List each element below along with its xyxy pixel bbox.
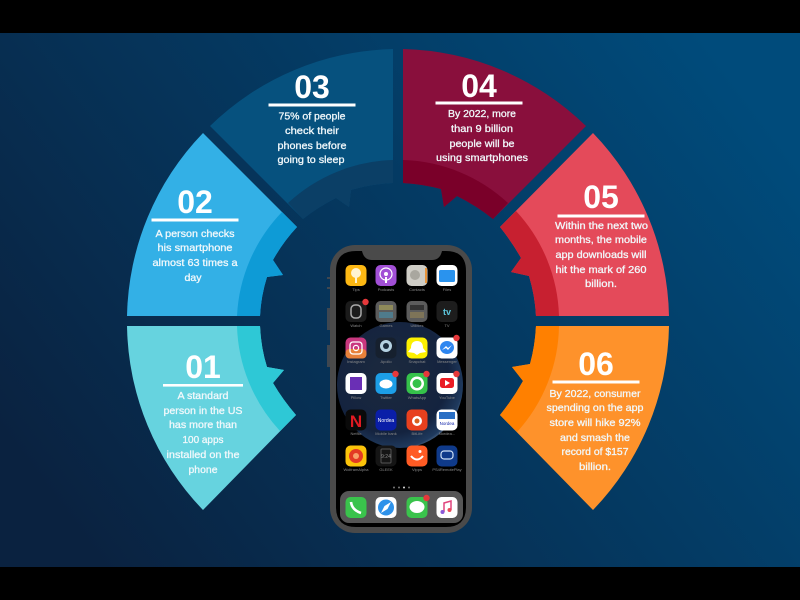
icon: Watch (346, 299, 369, 328)
icon: Instagram: Instagram (347, 359, 366, 364)
icon: YouTube: YouTube (439, 395, 456, 400)
icon: Pillow (346, 373, 366, 400)
icon: GLEEK: 9:24 (381, 454, 391, 460)
icon: TV (436, 301, 458, 328)
text 05 (555, 221, 648, 290)
text 06: record of $157 (562, 447, 629, 458)
text 04: using smartphones (436, 153, 528, 164)
text 03 (278, 112, 347, 166)
segment 06 main shape (500, 326, 669, 510)
icon: Files: Files (443, 287, 451, 292)
number 05: 05 (583, 179, 619, 215)
icon: Netflix: Netflix (350, 431, 362, 436)
segment 06 inner band (500, 326, 559, 432)
text 04: By 2022, more (448, 109, 516, 120)
icon: WolframAlpha: WolframAlpha (343, 467, 369, 472)
icon: Twitter (376, 371, 399, 400)
text 02: A person checks (156, 229, 234, 240)
icon: YouTube (436, 371, 460, 400)
icon: Snapchat (406, 338, 428, 364)
icon: Files (436, 265, 458, 292)
number 04: 04 (461, 68, 497, 104)
icon: Nordea: Nordea (440, 421, 455, 426)
icon: WhatsApp (406, 371, 430, 400)
panel: 02 checks per day (127, 133, 297, 316)
segment 02 main shape (127, 133, 297, 316)
text 05: Within the next two (555, 221, 648, 232)
icon: Utilities: Utilities (411, 323, 423, 328)
text 01: has more than (169, 420, 237, 431)
phone (327, 245, 472, 533)
icon: Vipps: Vipps (412, 467, 422, 472)
icon: BitLife: BitLife (411, 431, 423, 436)
icon: Contacts (406, 265, 428, 292)
icon: Messenger: Messenger (437, 359, 458, 364)
panel: 05 app downloads (500, 133, 669, 316)
text 05: months, the mobile (555, 235, 647, 246)
icon: Games: Games (380, 323, 392, 328)
wallpaper earth (337, 322, 463, 448)
text 03: phones before (278, 141, 347, 152)
icon: Games (376, 301, 396, 328)
side buttons (327, 277, 330, 367)
text 02 (152, 229, 238, 284)
panel: 01 apps installed (127, 326, 296, 510)
icon: Watch: Watch (350, 323, 362, 328)
segment 04 inner band (403, 160, 508, 219)
text 05: hit the mark of 260 (556, 265, 647, 276)
icon: Safari (376, 497, 396, 518)
text 04: than 9 billion (451, 124, 513, 135)
phone screen (336, 251, 466, 527)
text 05: billion. (585, 279, 617, 290)
icon: Contacts: Contacts (409, 287, 425, 292)
icon: Podcasts: Podcasts (378, 287, 394, 292)
text 03: 75% of people (278, 112, 346, 122)
icon: Netflix (346, 410, 366, 436)
icon: BitLife (406, 410, 428, 436)
text 01: 100 apps (182, 435, 224, 446)
panel: 04 billion users (403, 49, 586, 219)
icon: Music (436, 497, 458, 518)
icon: Apollo (376, 338, 396, 364)
icon: Snapchat: Snapchat (409, 359, 426, 364)
icon: PS4RemotePlay (432, 446, 462, 472)
text 06: spending on the app (546, 403, 644, 414)
text 02: day (184, 273, 202, 284)
text 06: store will hike 92% (550, 418, 640, 429)
text 05: app downloads will (556, 250, 646, 261)
icon: Pillow: Pillow (351, 395, 361, 400)
page dots (393, 486, 410, 488)
underline 02 (152, 218, 238, 222)
icon: PS4RemotePlay: PS4RemotePlay (432, 467, 462, 472)
text 06: and smash the (560, 433, 630, 444)
text 04 (436, 109, 528, 164)
underline 01 (163, 384, 243, 387)
icon: Vipps (406, 446, 428, 472)
icon: Mobile bank (375, 410, 397, 436)
text 01: A standard (178, 391, 229, 402)
icon: TV: TV (444, 323, 450, 328)
segment 03 inner band (288, 160, 393, 219)
segment 03 main shape (210, 49, 393, 219)
icon: Mobile bank: Nordea (378, 418, 394, 424)
underline 04 (436, 102, 522, 104)
segment 05 inner band (500, 211, 559, 316)
icon: Nordea (436, 410, 458, 436)
segment 04 main shape (403, 49, 586, 219)
icon: Twitter: Twitter (380, 395, 393, 400)
number 03: 03 (294, 69, 330, 105)
panel: 06 consumer spending (500, 326, 669, 510)
icon: Netflix: N (350, 412, 362, 431)
icon: TV: tv (443, 307, 451, 317)
dock (340, 491, 463, 523)
icon: Messenger (436, 335, 460, 364)
number 06: 06 (578, 346, 614, 382)
icon: Tips: Tips (352, 287, 360, 292)
number 01: 01 (185, 349, 221, 385)
icon: Podcasts (376, 265, 396, 292)
text 02: almost 63 times a (152, 258, 238, 269)
text 01: phone (188, 465, 218, 476)
icon: Mobile bank: Mobile bank (375, 431, 397, 436)
text 03: check their (285, 126, 340, 137)
panel: 03 before sleep (210, 49, 393, 219)
text 06 (546, 389, 644, 473)
icon: Tips (346, 265, 366, 292)
segment 05 main shape (500, 133, 669, 316)
icon: Messages (406, 495, 430, 518)
text 06: By 2022, consumer (550, 389, 641, 400)
underline 06 (552, 380, 640, 384)
icon: Phone (346, 497, 366, 518)
text 04: people will be (450, 139, 515, 150)
icon: Instagram (346, 338, 366, 364)
underline 03 (268, 104, 356, 106)
segment 02 inner band (237, 212, 297, 316)
icon: GLEEK: GLEEK (379, 467, 393, 472)
icon: GLEEK (376, 446, 396, 472)
underline 05 (558, 214, 644, 218)
number 02: 02 (177, 184, 213, 220)
icon: Utilities (406, 301, 428, 328)
text 02: his smartphone (158, 243, 233, 254)
icon: WhatsApp: WhatsApp (408, 395, 427, 400)
icon: Apollo: Apollo (380, 359, 392, 364)
text 06: billion. (579, 462, 611, 473)
text 01: person in the US (164, 406, 243, 417)
segment 01 main shape (127, 326, 296, 510)
phone body (330, 245, 472, 533)
text 01 (164, 391, 243, 476)
text 03: going to sleep (278, 155, 345, 166)
text 01: installed on the (166, 450, 240, 461)
icon: WolframAlpha (343, 446, 369, 472)
icon: Nordea: Nordea... (439, 431, 455, 436)
segment 01 inner band (237, 326, 296, 431)
